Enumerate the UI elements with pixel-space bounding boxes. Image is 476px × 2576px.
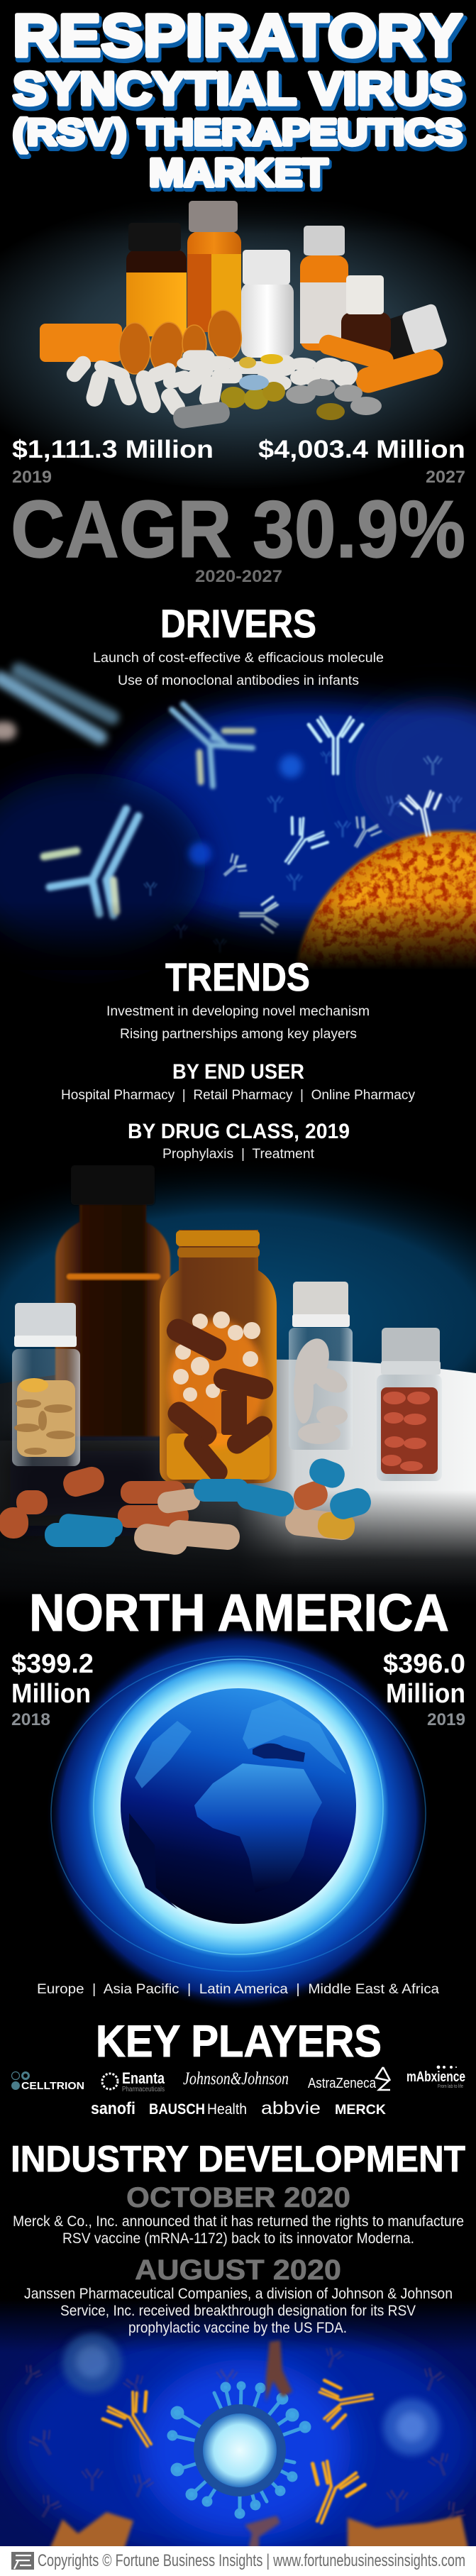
blurred orange antibodies	[50, 2340, 468, 2549]
logo: Enanta: Pharmaceuticals	[122, 2086, 165, 2093]
text: trends list: Rising partnerships among key players	[120, 1027, 357, 1042]
bottle: lying orange	[40, 324, 122, 362]
large blurred antibody	[0, 670, 112, 737]
stat: 2018: Million	[11, 1679, 91, 1709]
crisp antibodies	[218, 717, 448, 932]
text: other regions: Europe | Asia Pacific | Latin America | Middle East & Africa	[37, 1982, 439, 1997]
title: MARKET	[149, 150, 328, 194]
market value 2019: 2019	[12, 468, 52, 487]
continents	[129, 1700, 346, 1909]
blurred virus left	[62, 2333, 122, 2393]
stat: 2019: $396.0	[383, 1649, 465, 1679]
glow rings	[51, 1656, 426, 1971]
logo: Johnson & Johnson: Johnson&Johnson	[183, 2069, 289, 2088]
logo: Bausch Health: Health	[207, 2101, 247, 2118]
title: (RSV) THERAPEUTICS	[14, 116, 465, 157]
blurred virus right	[383, 2399, 440, 2455]
amber jar with capsules	[160, 1230, 277, 1486]
icon: Fortune Business Insights logo	[11, 2552, 34, 2570]
stat: 2018: 2018	[11, 1710, 50, 1729]
orange capsules	[316, 333, 446, 396]
title: SYNCYTIAL VIRUS	[14, 66, 465, 118]
far right vial	[377, 1328, 442, 1481]
development: August 2020: Janssen Pharmaceutical Companies, a division of Johnson & Johnson	[24, 2286, 453, 2302]
blurred antibody lower left	[44, 809, 138, 915]
panel: antibody illustration	[0, 659, 476, 975]
logo: mAbxience: From lab to life	[438, 2084, 463, 2089]
segment: by drug class: Prophylaxis | Treatment	[162, 1147, 315, 1162]
capsules on table	[0, 1455, 374, 1556]
logo: Sanofi: sanofi	[91, 2099, 135, 2118]
logo: Merck: MERCK	[335, 2103, 386, 2118]
logo: mAbxience	[406, 2066, 465, 2089]
logo: AstraZeneca: AstraZeneca	[308, 2076, 377, 2091]
sun-like cell	[297, 827, 476, 968]
market value 2027	[258, 436, 465, 487]
logo: Enanta: Enanta	[122, 2069, 165, 2087]
footer	[0, 2546, 476, 2576]
market value 2027: $4,003.4 Million	[258, 436, 465, 463]
logo: Enanta	[102, 2069, 165, 2093]
big brown bottle	[55, 1165, 170, 1436]
logo: Bausch Health: BAUSCH	[149, 2101, 205, 2118]
bottle: lying dark and white	[341, 275, 448, 368]
text: drivers list: Use of monoclonal antibodies in infants	[118, 673, 359, 688]
CAGR: 2020-2027	[195, 567, 282, 586]
panel: virus illustration	[0, 2299, 476, 2562]
grey tablets	[172, 379, 382, 429]
heading: drivers: DRIVERS	[160, 601, 316, 646]
title: RESPIRATORY	[13, 2, 463, 69]
white pills pile	[64, 350, 358, 419]
development: August 2020	[24, 2255, 453, 2336]
table surface	[0, 1360, 476, 1605]
panel: globe	[45, 1625, 431, 2011]
stat: 2019: 2019	[427, 1710, 465, 1729]
segment: by end user: BY END USER	[172, 1060, 304, 1084]
stat: 2018	[11, 1649, 94, 1729]
development: August 2020: AUGUST 2020	[135, 2255, 341, 2286]
market value 2019	[12, 436, 214, 487]
faint antibodies	[144, 752, 462, 952]
logo: Bausch Health	[149, 2101, 247, 2118]
softgel capsules	[119, 308, 245, 375]
title: SYNCYTIAL VIRUS	[13, 62, 463, 114]
segment: by drug class: BY DRUG CLASS, 2019	[128, 1120, 350, 1143]
middle right vial	[289, 1282, 353, 1450]
left vial	[12, 1303, 80, 1466]
panel: hero pill photo	[0, 192, 476, 490]
stat: 2019	[383, 1649, 465, 1729]
text: trends list	[106, 1004, 370, 1042]
text: trends list: Investment in developing novel mechanism	[106, 1004, 370, 1019]
development: October 2020: RSV vaccine (mRNA-1172) back to its innovator Moderna.	[62, 2230, 414, 2247]
coloured tablets	[221, 354, 345, 420]
heading: industry development: INDUSTRY DEVELOPMENT	[11, 2139, 465, 2180]
globe sphere	[121, 1688, 356, 1924]
development: October 2020	[13, 2182, 464, 2247]
title	[13, 2, 465, 197]
central virus	[169, 2383, 309, 2517]
title: MARKET	[150, 153, 329, 197]
logo: AbbVie: abbvie	[261, 2098, 321, 2118]
text: drivers list: Launch of cost-effective & efficacious molecule	[93, 651, 384, 666]
heading: key players: KEY PLAYERS	[96, 2017, 382, 2066]
panel: bottles photo	[0, 1157, 476, 1605]
bottle: white	[241, 250, 294, 358]
bottle: orange tall	[187, 201, 241, 332]
heading: north america: NORTH AMERICA	[29, 1583, 449, 1642]
stat: 2019: Million	[386, 1679, 465, 1709]
segment: by end user	[61, 1060, 415, 1103]
yellow antibodies	[99, 2372, 377, 2533]
stat: 2018: $399.2	[11, 1649, 94, 1679]
logo: AstraZeneca	[308, 2067, 390, 2091]
heading: trends: TRENDS	[165, 954, 310, 999]
title: (RSV) THERAPEUTICS	[13, 112, 463, 153]
logos: key players	[11, 2066, 465, 2118]
development: August 2020: prophylactic vaccine by the US FDA.	[128, 2320, 347, 2336]
market value 2027: 2027	[426, 468, 465, 487]
blurred antibody centre	[172, 704, 253, 786]
segment: by end user: Hospital Pharmacy | Retail Pharmacy | Online Pharmacy	[61, 1088, 415, 1103]
bottle: white label orange top	[300, 226, 348, 351]
development: August 2020: Service, Inc. received breakthrough designation for its RSV	[60, 2303, 416, 2319]
development: October 2020: OCTOBER 2020	[126, 2182, 350, 2213]
logo: Celltrion: CELLTRION	[21, 2080, 84, 2092]
market value 2019: $1,111.3 Million	[12, 436, 214, 463]
bottle: dark with amber label	[126, 223, 187, 336]
segment: by drug class	[128, 1120, 350, 1162]
title: RESPIRATORY	[14, 6, 465, 72]
logo: Celltrion	[11, 2072, 84, 2092]
text: drivers list	[93, 651, 384, 688]
faint background antibodies	[18, 2346, 467, 2529]
